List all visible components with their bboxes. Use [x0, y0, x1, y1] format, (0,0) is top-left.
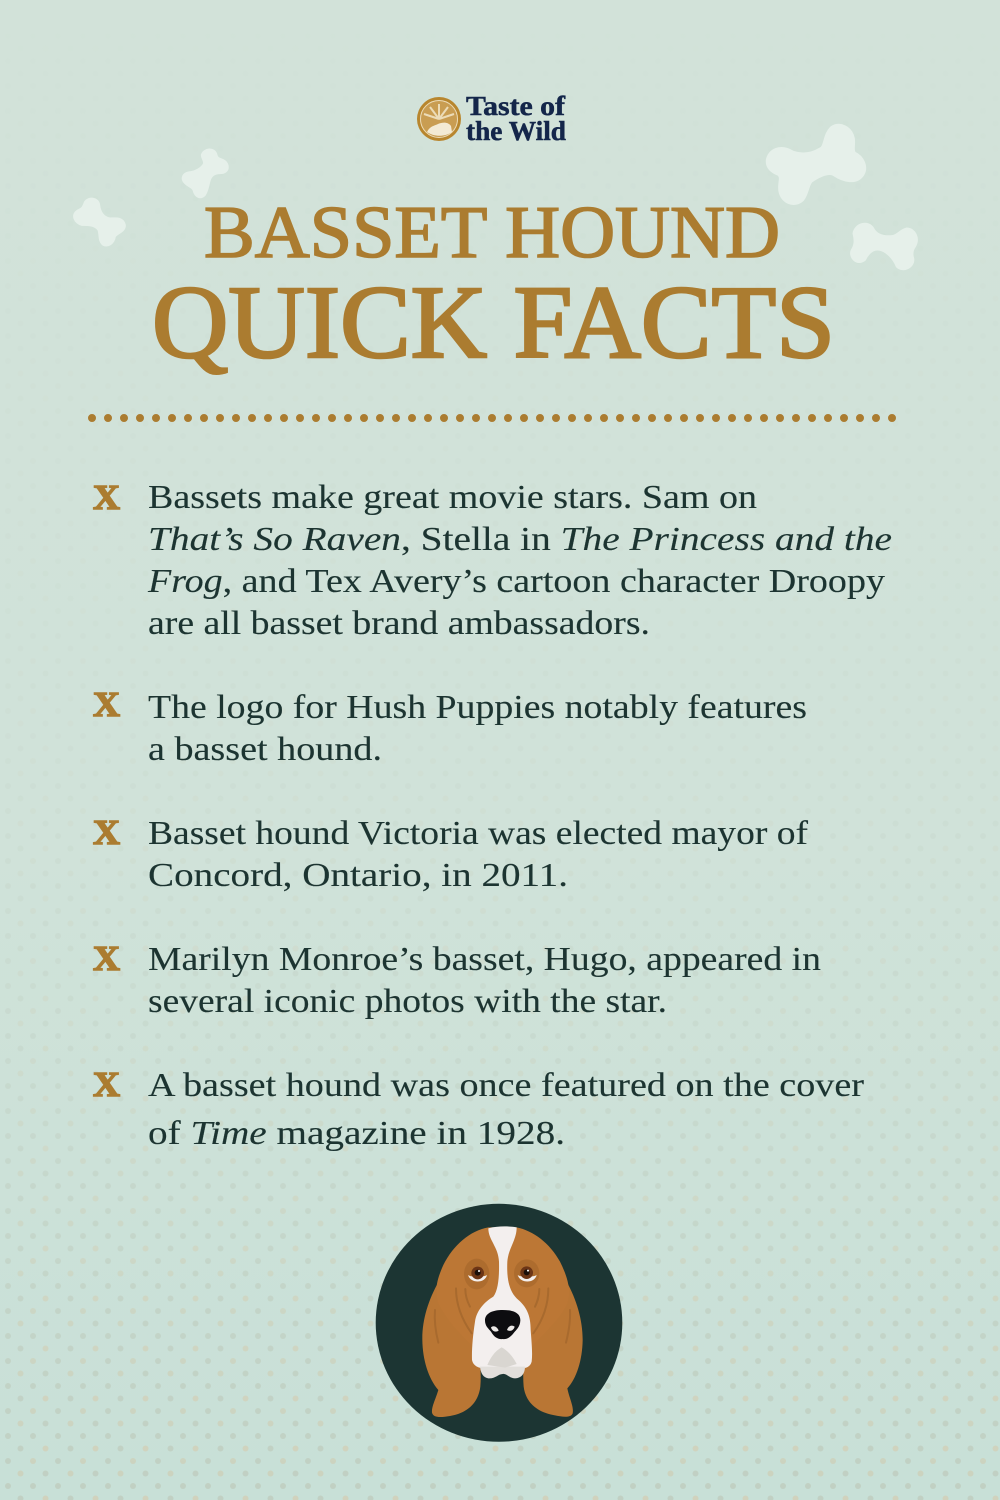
fact 1: movie stars: are all basset brand ambassadors.	[148, 605, 650, 642]
logo: Taste of the Wild: Taste of	[466, 91, 566, 121]
title: QUICK FACTS	[152, 265, 835, 380]
dog ears	[422, 1282, 583, 1417]
icon: small bone top left	[183, 149, 228, 197]
dotted divider	[92, 414, 893, 422]
fact 2: Hush Puppies: The logo for Hush Puppies notably features	[148, 689, 807, 726]
illustration: basset hound portrait	[376, 1204, 622, 1442]
fact 4: Marilyn Monroe: Marilyn Monroe’s basset, Hugo, appeared in	[148, 941, 821, 978]
logo: Taste of the Wild: the Wild	[466, 116, 566, 146]
fact 4: Marilyn Monroe: X	[93, 939, 120, 978]
fact 1: movie stars: X	[93, 478, 120, 517]
fact 3: Victoria mayor	[93, 813, 809, 894]
dog chin	[480, 1367, 525, 1378]
icon: small bone left	[74, 198, 125, 246]
icon: large bone top right	[767, 125, 865, 204]
dog mouth shadow	[487, 1347, 517, 1368]
fact 3: Victoria mayor: Concord, Ontario, in 2011.	[148, 857, 568, 894]
dog white blaze and muzzle	[472, 1226, 532, 1369]
fact 5: Time magazine: A basset hound was once featured on the cover	[148, 1067, 865, 1104]
fact 5: Time magazine: of Time magazine in 1928.	[148, 1115, 565, 1152]
fact 3: Victoria mayor: Basset hound Victoria was elected mayor of	[148, 815, 809, 852]
fact 1: movie stars: That’s So Raven , Stella in The Princess and the	[148, 521, 892, 558]
fact 1: movie stars: Bassets make great movie stars. Sam on	[148, 479, 757, 516]
title: BASSET HOUND	[204, 192, 780, 274]
dog nose	[485, 1310, 520, 1339]
fact 5: Time magazine: X	[93, 1065, 120, 1104]
fact 2: Hush Puppies	[93, 685, 807, 768]
fact 4: Marilyn Monroe: several iconic photos with the star.	[148, 983, 667, 1020]
dog face wrinkles	[435, 1288, 570, 1343]
fact 2: Hush Puppies: X	[93, 685, 120, 724]
icon: small bone right	[851, 224, 917, 269]
icon: logo badge	[417, 97, 461, 141]
dog head	[436, 1227, 569, 1347]
dog eye patches	[464, 1259, 539, 1289]
title	[152, 192, 835, 380]
logo: Taste of the Wild	[417, 91, 566, 146]
fact 1: movie stars: Frog, and Tex Avery’s cartoon character Droopy	[147, 563, 885, 600]
dog eyes	[468, 1266, 537, 1282]
fact 1: movie stars	[93, 478, 892, 642]
fact 5: Time magazine	[93, 1065, 865, 1152]
fact 3: Victoria mayor: X	[93, 813, 120, 852]
fact 4: Marilyn Monroe	[93, 939, 821, 1020]
fact 2: Hush Puppies: a basset hound.	[148, 731, 382, 768]
